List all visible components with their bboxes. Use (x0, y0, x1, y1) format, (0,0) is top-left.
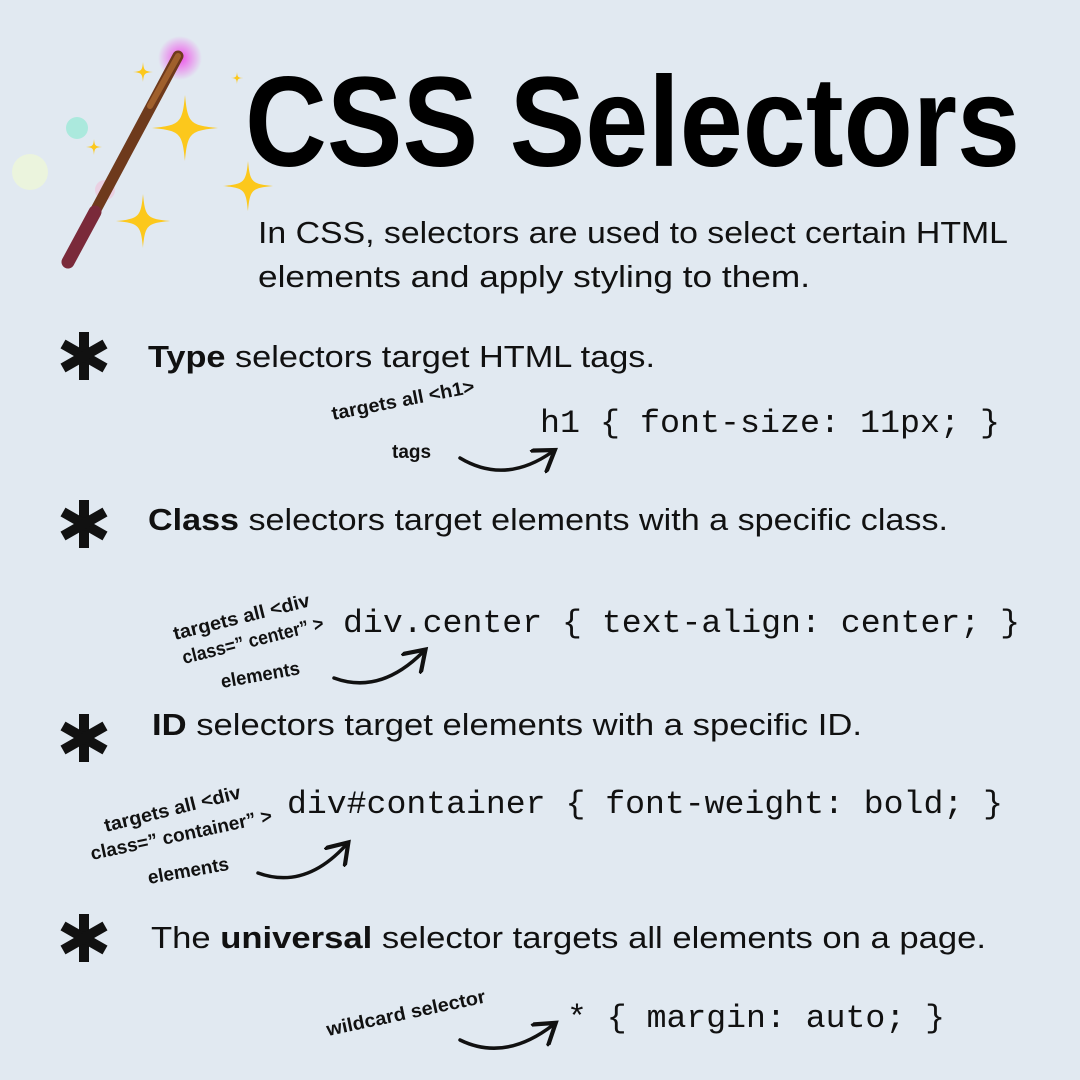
annotation: universal: wildcard selector (324, 987, 488, 1041)
annotation: class: targets all <div (171, 590, 312, 645)
text: universal selector: The universal selector targets all elements on a page. (151, 920, 986, 955)
icon: asterisk 1 (63, 332, 105, 380)
annotation: id: elements (146, 854, 231, 889)
text: type selectors: Type selectors target HTML tags. (148, 339, 655, 374)
annotation: id (89, 782, 274, 889)
code: universal: * { margin: auto; } (567, 1000, 945, 1037)
annotation: class (171, 590, 326, 693)
arrow: universal (460, 1025, 553, 1048)
arrow: type (460, 452, 552, 470)
arrow: class (334, 652, 423, 683)
arrow: id (258, 845, 346, 878)
annotation: id: class=” container” > (89, 806, 274, 865)
code: type: h1 { font-size: 11px; } (540, 405, 1000, 442)
text: class selectors: Class selectors target elements with a specific class. (148, 502, 948, 537)
intro text (258, 215, 1008, 294)
intro text: elements and apply styling to them. (258, 259, 810, 294)
annotation: type: targets all <h1> (330, 377, 476, 425)
icon: asterisk 4 (63, 914, 105, 962)
text: ID selectors: ID selectors target elements with a specific ID. (152, 707, 862, 742)
icon: asterisk 3 (63, 714, 105, 762)
annotation: class: class=” center” > (180, 613, 326, 669)
icon: asterisk 2 (63, 500, 105, 548)
code: id: div#container { font-weight: bold; } (287, 786, 1003, 823)
annotation: type: tags (392, 442, 431, 463)
annotation: type (330, 377, 476, 463)
annotation: id: targets all <div (102, 782, 243, 837)
annotation: class: elements (219, 658, 302, 693)
intro text: In CSS, selectors are used to select certain HTML (258, 215, 1008, 250)
code: class: div.center { text-align: center; } (343, 605, 1020, 642)
icon: magic wand with sparkles (12, 36, 273, 262)
